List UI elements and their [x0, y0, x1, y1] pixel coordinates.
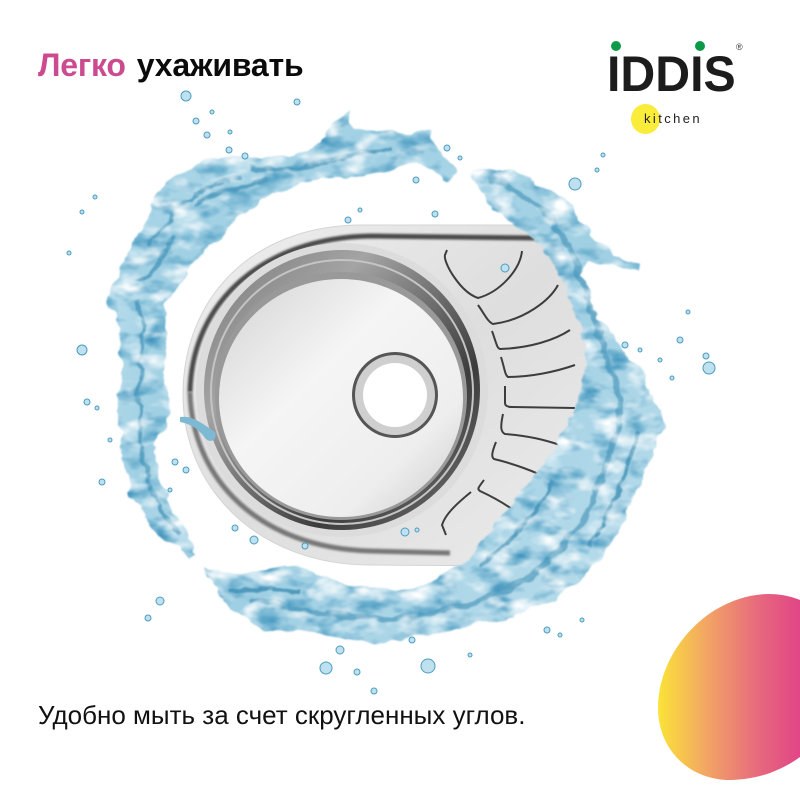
decorative gradient blob — [658, 594, 800, 780]
sink: drainer grooves — [442, 250, 575, 535]
logo: registered mark: ® — [736, 42, 743, 52]
sink: drain — [352, 352, 438, 438]
logo: iddis kitchen — [607, 41, 743, 134]
logo: yellow dot — [631, 104, 660, 134]
sink — [183, 225, 605, 566]
title: Легко ухаживать — [38, 47, 303, 83]
water: upper left arc — [108, 110, 456, 317]
logo: green dot right — [695, 41, 705, 51]
water: small inner splash — [180, 417, 216, 441]
logo: wordmark: IDDIS — [607, 46, 736, 102]
water: right arc and bottom sweep — [205, 170, 665, 641]
water: left descending band — [116, 282, 197, 556]
sink: bowl — [196, 243, 488, 537]
logo: green dot left — [611, 41, 621, 51]
water splash swirl — [67, 91, 715, 694]
logo: kitchen: kitchen — [644, 111, 702, 126]
sink: outer rim line — [190, 236, 535, 392]
sink: steel body — [183, 225, 605, 566]
caption: Удобно мыть за счет скругленных углов. — [38, 700, 525, 730]
water droplets — [67, 91, 715, 694]
